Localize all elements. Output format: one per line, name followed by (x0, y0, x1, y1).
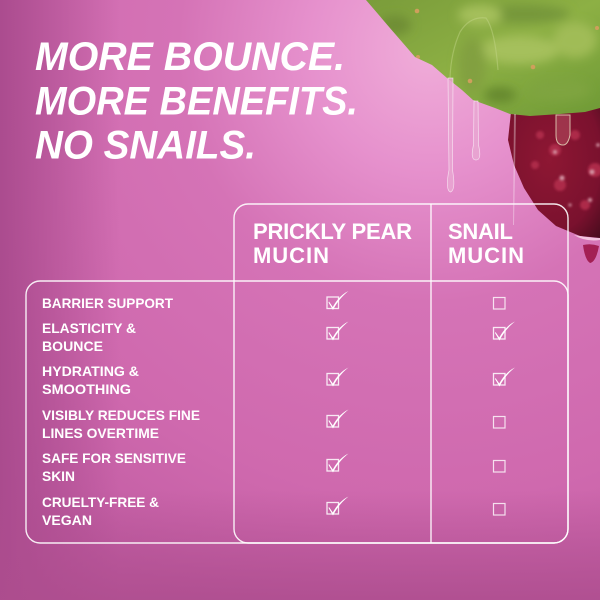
title (35, 35, 358, 168)
row labels: SKIN (42, 468, 75, 484)
icon: prickly pear fruit (508, 106, 600, 263)
row labels: CRUELTY-FREE & (42, 494, 159, 510)
icon: mucin drips (447, 78, 570, 225)
column heading: snail mucin: MUCIN (448, 243, 524, 268)
title: MORE BOUNCE. (35, 35, 345, 79)
snail mucin marks (494, 298, 515, 515)
title: MORE BENEFITS. (35, 80, 358, 124)
row labels: LINES OVERTIME (42, 425, 159, 441)
column heading: snail mucin: SNAIL (448, 219, 513, 244)
prickly pear checkmarks (327, 291, 348, 516)
title: NO SNAILS. (35, 124, 256, 168)
row labels: VEGAN (42, 512, 92, 528)
row labels: BOUNCE (42, 338, 103, 354)
column heading: prickly pear mucin: MUCIN (253, 243, 329, 268)
row labels: BARRIER SUPPORT (42, 295, 173, 311)
column heading: snail mucin (448, 219, 524, 268)
row labels: HYDRATING & (42, 363, 139, 379)
column heading: prickly pear mucin (253, 219, 412, 268)
row labels: VISIBLY REDUCES FINE (42, 407, 200, 423)
column heading: prickly pear mucin: PRICKLY PEAR (253, 219, 412, 244)
icon: cactus pad (366, 0, 600, 116)
comparison table frame (26, 204, 568, 543)
row labels (42, 295, 200, 528)
row labels: SMOOTHING (42, 381, 131, 397)
row labels: SAFE FOR SENSITIVE (42, 450, 186, 466)
row labels: ELASTICITY & (42, 320, 136, 336)
